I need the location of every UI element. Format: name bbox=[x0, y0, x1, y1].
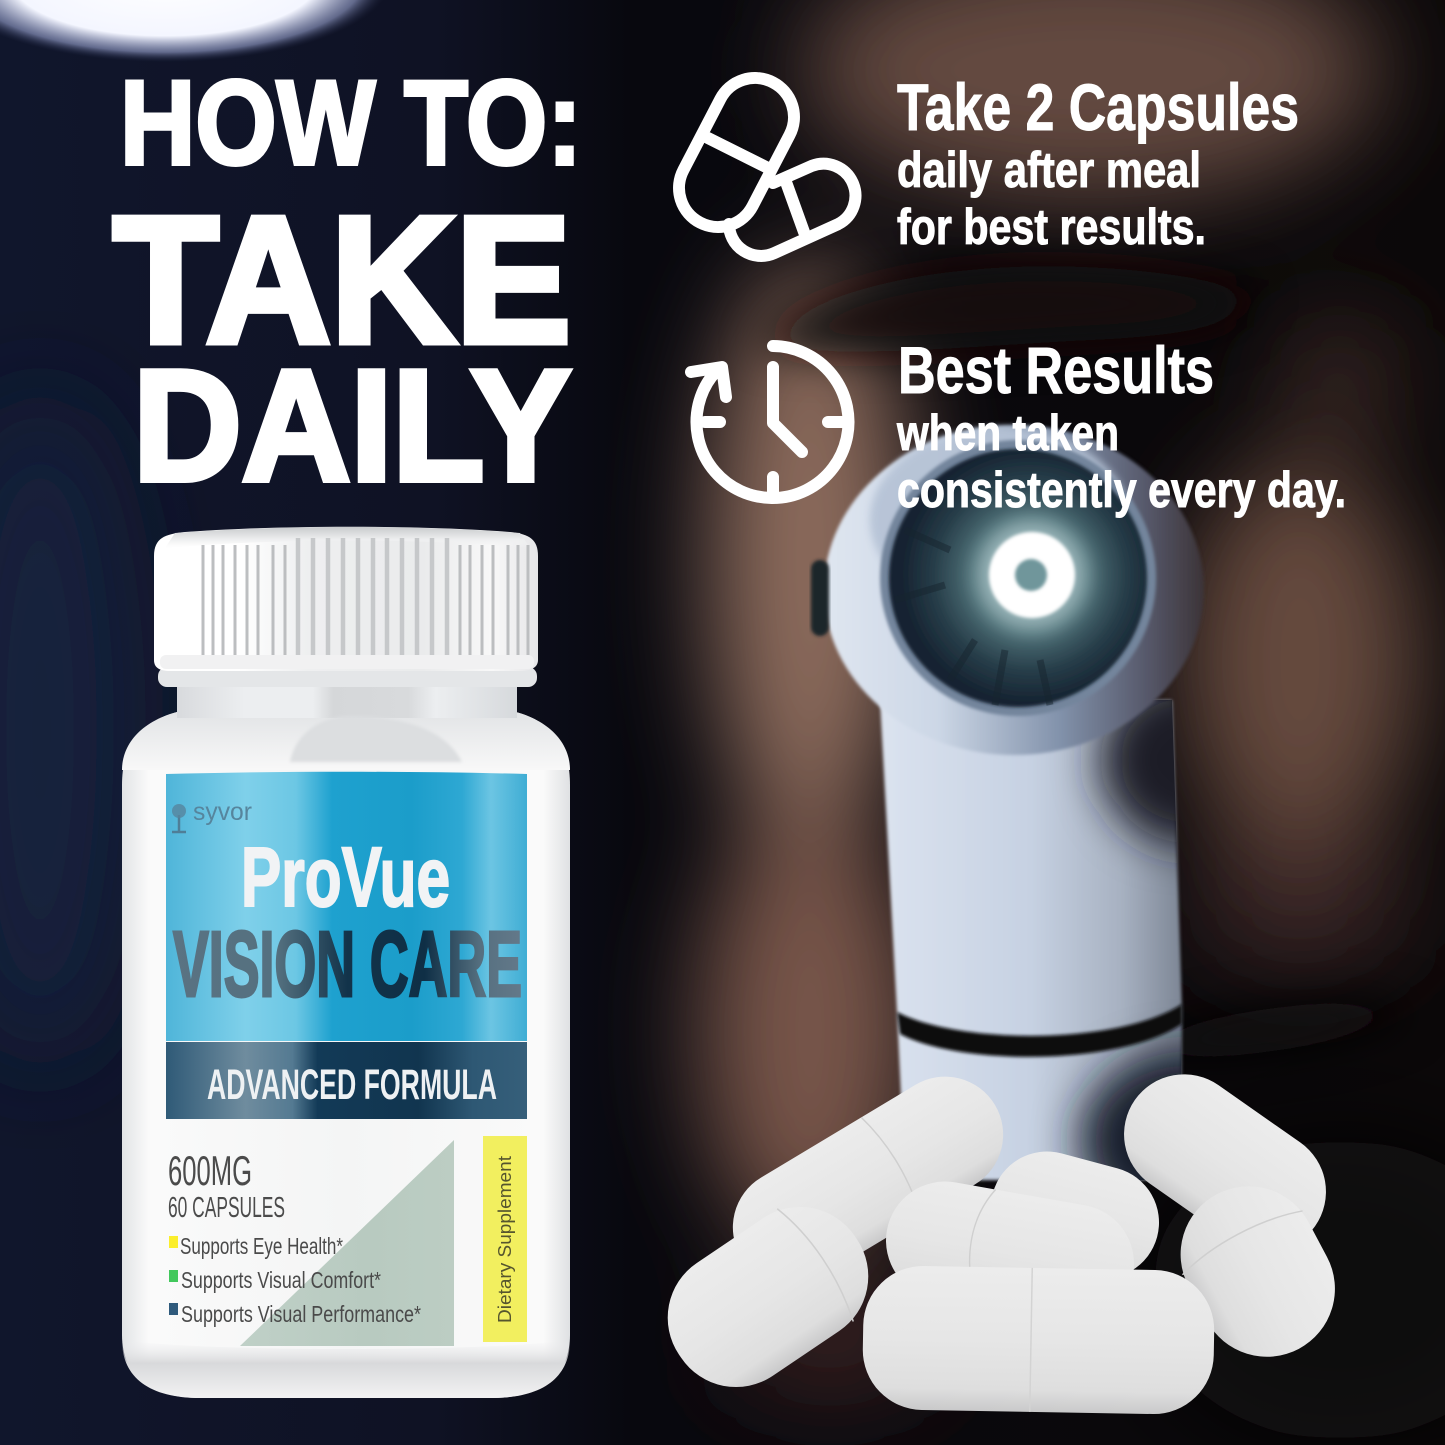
capsule bbox=[862, 1265, 1215, 1415]
step 2 heading: Best Results bbox=[898, 333, 1214, 407]
bottle neck ring bbox=[158, 667, 537, 687]
cap ridges centre bbox=[298, 538, 447, 656]
side knob bbox=[811, 560, 829, 636]
capsule bbox=[877, 1172, 1143, 1332]
benefit 1: Supports Eye Health* bbox=[180, 1233, 343, 1259]
how to line: HOW TO: bbox=[120, 56, 582, 190]
step 2 text bbox=[896, 333, 1346, 518]
step 1 text bbox=[897, 70, 1299, 255]
bottle body bbox=[122, 712, 570, 1398]
bullet: yellow bbox=[169, 1236, 178, 1248]
capsule bbox=[1157, 1162, 1359, 1381]
take line: TAKE bbox=[113, 180, 571, 381]
lens light ring bbox=[989, 532, 1075, 618]
step 2 detail line 2: consistently every day. bbox=[897, 462, 1346, 518]
bottle base shading bbox=[122, 1340, 570, 1398]
dietary supplement text: Dietary Supplement bbox=[495, 1156, 515, 1323]
product label: blue panel bbox=[166, 772, 527, 1041]
title: how to take daily bbox=[113, 56, 582, 514]
bottle cap bbox=[154, 527, 538, 671]
benefit 3: Supports Visual Performance* bbox=[181, 1301, 421, 1327]
brand tree trunk bbox=[172, 815, 186, 832]
capsule bbox=[711, 1055, 1025, 1307]
product subtitle: VISION CARE bbox=[173, 912, 522, 1016]
dietary supplement strip bbox=[483, 1136, 527, 1342]
icon: clock with arrow bbox=[691, 346, 848, 498]
brand name: syvor bbox=[193, 798, 252, 826]
daily line: DAILY bbox=[133, 338, 571, 514]
instrument head bbox=[824, 425, 1204, 755]
brand leaves bbox=[172, 804, 186, 818]
lens centre bbox=[1015, 559, 1047, 591]
cap ridges edges bbox=[203, 545, 528, 655]
step 2 detail line 1: when taken bbox=[896, 405, 1119, 461]
step 1 detail line 2: for best results. bbox=[897, 199, 1206, 255]
cap lower edge bbox=[160, 655, 534, 669]
lens inner blades bbox=[895, 530, 1050, 705]
capsule bbox=[978, 1139, 1172, 1291]
lens rim bbox=[880, 440, 1156, 716]
lens housing bbox=[889, 449, 1147, 707]
product bottle bbox=[122, 527, 570, 1398]
bottle shoulder shading bbox=[122, 712, 570, 770]
dosage: 600MG bbox=[168, 1147, 252, 1194]
handle shading bbox=[1046, 700, 1182, 1180]
instrument head top bbox=[870, 428, 1130, 612]
advanced formula band bbox=[166, 1042, 527, 1119]
brand logo bbox=[172, 798, 252, 832]
product name: ProVue bbox=[241, 830, 450, 924]
capsule count: 60 CAPSULES bbox=[168, 1192, 285, 1224]
lens light halo bbox=[977, 520, 1087, 630]
benefit 2: Supports Visual Comfort* bbox=[181, 1267, 381, 1293]
handle band bbox=[897, 1004, 1182, 1057]
icon: two capsules bbox=[665, 64, 855, 256]
top light glare bbox=[0, 0, 390, 62]
shoulder highlight bbox=[290, 716, 462, 762]
capsule bbox=[1100, 1051, 1350, 1275]
bottle neck bbox=[177, 682, 517, 718]
cap rim bbox=[165, 527, 530, 548]
bullet: green bbox=[169, 1270, 178, 1282]
step 1 detail line 1: daily after meal bbox=[897, 142, 1201, 198]
bullet: navy bbox=[169, 1303, 178, 1315]
capsule bbox=[642, 1181, 894, 1413]
ophthalmoscope instrument bbox=[809, 422, 1204, 1182]
instrument handle bbox=[880, 700, 1182, 1180]
loose capsules bbox=[642, 1051, 1359, 1415]
advanced formula text: ADVANCED FORMULA bbox=[207, 1061, 497, 1109]
step 1 heading: Take 2 Capsules bbox=[897, 70, 1299, 144]
green triangle bbox=[240, 1140, 454, 1346]
